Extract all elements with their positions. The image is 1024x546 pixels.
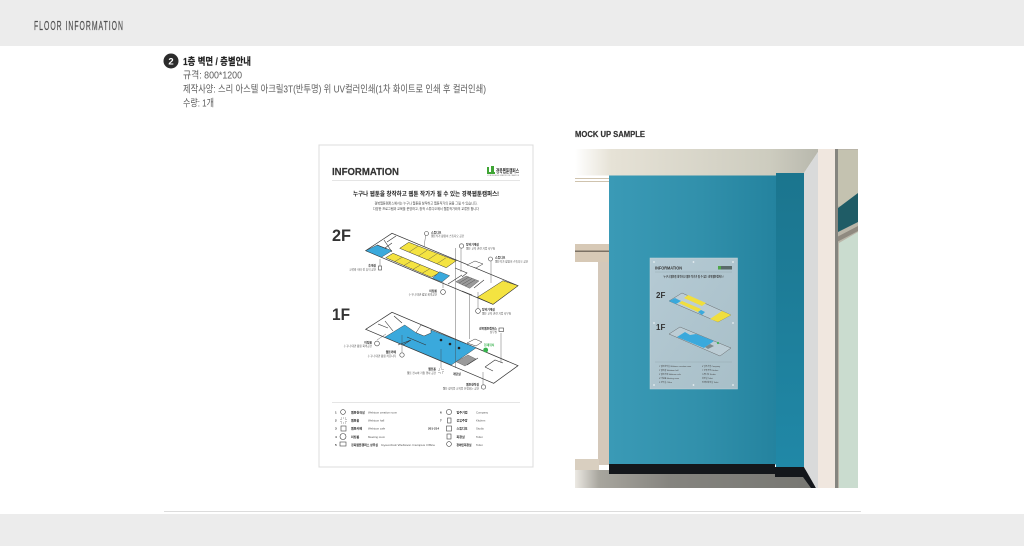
legend right column: 장애인화장실 bbox=[456, 442, 472, 447]
black baseboard bbox=[609, 464, 816, 488]
poster on wall: INFORMATION bbox=[655, 266, 682, 270]
poster headline: 누구나 웹툰을 창작하고 웹툰 작가가 될 수 있는 경북웹툰캠퍼스! bbox=[353, 190, 499, 198]
panel: information poster design bbox=[319, 145, 533, 467]
floor plan callouts: 누구나 대관 활용 커뮤니티 bbox=[368, 354, 397, 358]
legend right column: Kitchen bbox=[476, 418, 486, 422]
section heading with number badge bbox=[164, 54, 251, 68]
floor plan callouts: 웹툰 창작을 교육을 진행하는 공간 bbox=[443, 386, 480, 390]
teal wall bbox=[609, 176, 776, 464]
floor plan callouts: 누구나 대관 활용 회의공간 bbox=[344, 344, 373, 348]
legend left column bbox=[335, 410, 436, 447]
poster intro text bbox=[373, 200, 479, 211]
1F label: 1F bbox=[332, 305, 350, 324]
floor plan callouts: 미팅룸 bbox=[429, 289, 437, 293]
legend left column: 2 bbox=[335, 418, 337, 422]
poster logo: 경북웹툰캠퍼스 bbox=[496, 167, 519, 175]
top header band bbox=[0, 0, 1024, 46]
floor plan callouts: 계단실 bbox=[453, 372, 461, 376]
specification text block: 규격: 800*1200 bbox=[183, 68, 242, 82]
poster on wall: 누구나 웹툰을 창작하고 웹툰 작가가 될 수 있는 경북웹툰캠퍼스! bbox=[664, 274, 724, 278]
2F label: 2F bbox=[332, 226, 351, 245]
floor plan: 1F: 현재위치 bbox=[484, 343, 495, 347]
poster intro text: 경북웹툰캠퍼스에서는 누구나 웹툰을 창작하고 웹툰작가의 꿈을 그릴 수 있습니다. bbox=[374, 200, 478, 206]
poster on wall: 2 웹툰홀 Webtoon hall bbox=[659, 368, 679, 372]
legend right column: 입주기업 bbox=[456, 410, 468, 414]
legend right column: Toilet bbox=[476, 443, 483, 447]
specification text block: 제작사양: 스리 아스텔 아크릴3T(반투명) 위 UV컬러인쇄(1차 화이트로 인쇄 후 컬러인쇄) bbox=[183, 82, 486, 96]
bottom footer band bbox=[0, 514, 1024, 546]
floor plan callouts: 경북웹툰캠퍼스 bbox=[479, 326, 497, 330]
legend left column: 4 bbox=[335, 435, 337, 439]
floor plan callouts: 웹툰 교육 관련 기업 사무실 bbox=[482, 311, 512, 315]
icon: current location marker bbox=[483, 348, 488, 352]
legend left column: Meeting room bbox=[368, 435, 386, 439]
floor bbox=[575, 470, 815, 488]
poster on wall: 스튜디오 Studio bbox=[702, 372, 716, 376]
legend left column: 경북웹툰캠퍼스 상무실 bbox=[351, 442, 378, 447]
poster on wall: 6 입주기업 Company bbox=[702, 364, 720, 368]
poster on wall: 4 미팅룸 Meeting room bbox=[659, 376, 679, 380]
poster on wall: 1F bbox=[656, 323, 665, 332]
poster on wall: 3 웹툰카페 Webtoon cafe bbox=[659, 372, 682, 376]
legend bbox=[335, 409, 489, 447]
legend right column: Toilet bbox=[476, 435, 483, 439]
legend right column: 공유주방 bbox=[456, 418, 468, 422]
poster logo bbox=[487, 166, 520, 177]
legend left column: 웹툰홀 bbox=[351, 418, 360, 422]
poster intro text: 다양한 프로그램과 교육을 운영하고, 창작 스튜디오에서 웹툰작가와의 교류를 합니다 bbox=[373, 206, 479, 211]
specification text block bbox=[183, 68, 486, 110]
poster on wall bbox=[650, 258, 738, 389]
legend right column: 7 bbox=[440, 418, 442, 422]
legend left column: Gyeonbuk Webtoon Campus Office bbox=[381, 443, 436, 447]
leader lines bbox=[377, 233, 501, 385]
floor plan: 2F bbox=[366, 233, 518, 304]
floor plan callouts: 웹툰 교육 관련 기업 사무실 bbox=[466, 246, 496, 250]
legend left column: 웹툰카페 bbox=[351, 426, 362, 430]
legend left column: 웹툰창작실 bbox=[351, 410, 365, 414]
poster on wall: 장애인화장실 Toilet bbox=[702, 380, 719, 384]
legend right column bbox=[428, 409, 489, 447]
legend left column: Webtoon hall bbox=[368, 418, 385, 422]
floor plan callouts: 미팅룸 bbox=[364, 340, 372, 344]
floor plan callouts: 스튜디오 bbox=[495, 256, 506, 260]
poster on wall: 7 공유주방 Kitchen bbox=[702, 368, 718, 372]
legend left column: 3 bbox=[335, 426, 337, 430]
legend right column: 화장실 bbox=[456, 434, 465, 439]
legend left column: 미팅룸 bbox=[351, 434, 360, 439]
teal pillar bbox=[776, 173, 804, 467]
section heading with number badge: 1층 벽면 / 층별안내 bbox=[183, 55, 251, 68]
floor plan callouts: 교류와 쉬어 갈 휴식 공간 bbox=[349, 267, 377, 271]
right window bbox=[835, 149, 858, 488]
poster on wall: 2F bbox=[656, 291, 665, 300]
legend right column: Studio bbox=[476, 426, 484, 430]
floor plan callouts: 상무실 bbox=[490, 330, 498, 334]
left door frame bbox=[575, 178, 609, 470]
floor plan callouts: 웹툰카페 bbox=[386, 350, 396, 354]
floor plan callouts bbox=[344, 230, 529, 390]
poster heading: INFORMATION bbox=[332, 167, 399, 178]
legend right column: 201-214 bbox=[428, 426, 439, 430]
poster logo: GYEONGBUK WEBTOON CAMPUS bbox=[487, 174, 520, 177]
floor plan callouts: 스튜디오 bbox=[431, 230, 442, 234]
panel: mock up photo bbox=[575, 149, 858, 488]
mock up heading: MOCK UP SAMPLE bbox=[575, 130, 646, 139]
floor plan callouts: 탕비기계실 bbox=[482, 308, 495, 312]
legend left column: Webtoon creation room bbox=[368, 410, 398, 414]
floor plan callouts: 웹툰홀 bbox=[428, 367, 436, 371]
page title: FLOOR INFORMATION bbox=[34, 20, 124, 34]
floor plan callouts: 휴게실 bbox=[368, 264, 376, 268]
legend left column: Webtoon cafe bbox=[368, 426, 386, 430]
specification text block: 수량: 1개 bbox=[183, 98, 214, 110]
section heading with number badge: 2 bbox=[168, 56, 174, 68]
poster on wall: 5 상무실 Office bbox=[659, 380, 673, 384]
legend right column: Company bbox=[476, 410, 489, 414]
floor plan callouts: 웹툰창작실 bbox=[466, 382, 479, 386]
poster on wall: 화장실 Toilet bbox=[702, 376, 713, 380]
legend left column: 5 bbox=[335, 443, 337, 447]
floor plan callouts: 탕비기계실 bbox=[466, 242, 479, 246]
floor plan callouts: 누구나 대관 활용 회의공간 bbox=[409, 292, 438, 296]
floor plan: 1F bbox=[366, 312, 518, 383]
legend left column: 1 bbox=[335, 410, 337, 414]
poster on wall: 1 웹툰창작실 Webtoon creation room bbox=[659, 364, 692, 368]
legend right column: 스튜디오 bbox=[456, 426, 468, 430]
side wall bbox=[804, 152, 818, 488]
floor plan callouts: 웹툰작가 활용이 스튜디오 공간 bbox=[495, 259, 529, 263]
ceiling bbox=[575, 149, 818, 176]
floor plan callouts: 웹툰 전시와 각종 행사 공간 bbox=[407, 371, 437, 375]
floor plan callouts: 웹툰작가 활용이 스튜디오 공간 bbox=[431, 234, 465, 238]
legend right column: 6 bbox=[440, 410, 442, 414]
white column bbox=[818, 149, 835, 488]
